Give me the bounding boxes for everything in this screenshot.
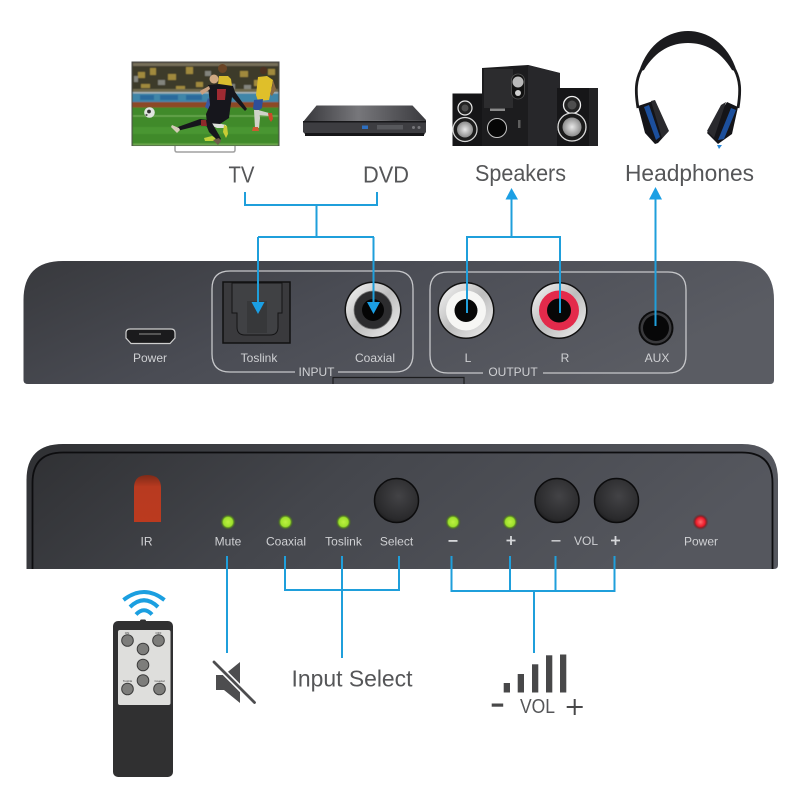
icon: remote control [113,620,173,777]
label: plus [506,536,516,545]
icon: TV [132,62,280,152]
callout line: Mute [226,556,228,653]
icon: DVD player [303,106,426,136]
arrowhead: Speakers [506,188,518,200]
arrow: AUX to headphones [649,187,662,326]
TV stand [175,146,235,152]
label: R: R [561,351,570,365]
right speaker [557,88,598,146]
remote buttons [122,635,165,695]
arrows: outputs to speakers [467,188,560,313]
icon: wifi signal [124,592,164,614]
label: Select: Select [380,534,414,548]
device front body [26,444,778,569]
label: DVD: DVD [363,162,409,188]
port: Coaxial [344,282,402,338]
label: Input Select: Input Select [292,666,413,692]
label: Power: Power [684,534,718,548]
remote labels: Toslink [123,679,133,683]
label: minus [448,540,458,542]
arrowhead: Toslink [252,302,264,314]
icon: headphones [636,31,740,149]
group outline: output [430,272,686,373]
right player [252,67,276,131]
arrows: inputs from TV and DVD [245,192,380,314]
group outline: input [212,271,413,372]
label: Mute: Mute [215,534,242,548]
port: R [530,282,588,339]
arrowhead: Headphones [649,187,662,200]
port: micro USB power [126,329,175,344]
button: Select [374,478,418,522]
bezel line [32,452,772,569]
LED: volume up [502,514,518,530]
label: Power: Power [133,351,167,365]
label: volume control [552,534,620,548]
port: AUX [638,310,674,346]
label: Coaxial: Coaxial [266,534,306,548]
label: Coaxial: Coaxial [355,351,395,365]
LED: volume down [445,514,461,530]
label: AUX: AUX [645,351,669,365]
remote labels [123,631,165,683]
remote labels: Coaxial [154,679,165,683]
LED: Mute [220,514,236,530]
striker [171,74,247,145]
icon: mute speaker [213,661,255,703]
panel: front of device [26,444,778,569]
notch [333,378,464,384]
port: Toslink [223,282,290,343]
remote labels: OFF [156,631,162,635]
LED: Power [692,514,708,530]
label: TV: TV [228,162,255,188]
icon: speakers [452,65,598,146]
arrowhead: Coaxial [367,302,380,314]
LED: Toslink [336,514,352,530]
label: INPUT: INPUT [298,365,335,379]
label: Speakers: Speakers [475,160,566,186]
port: L [438,282,494,339]
LED: Coaxial [278,514,294,530]
label: Headphones: Headphones [625,160,754,186]
IR window [134,475,161,522]
football [144,107,155,118]
label: Toslink: Toslink [325,534,363,548]
yellow defender [204,64,232,141]
label: OUTPUT: OUTPUT [488,365,538,379]
players [144,64,276,145]
minus sign [492,704,503,707]
label: volume control: VOL [574,534,598,548]
device rear body [24,261,774,384]
callout lines: Input Select [285,556,399,658]
TV screen photo [132,62,278,146]
label: IR: IR [140,534,153,548]
icon: volume bars [492,654,583,718]
subwoofer [482,65,560,146]
plus sign [567,699,583,715]
label: VOL: VOL [520,696,555,718]
left speaker [452,94,482,146]
label: L: L [465,351,472,365]
button: volume down [535,478,579,522]
panel: rear of device [24,261,774,384]
button: volume up [594,478,638,522]
remote labels: ON [125,631,129,635]
label: Toslink: Toslink [241,351,278,365]
callout lines: volume [452,556,614,653]
